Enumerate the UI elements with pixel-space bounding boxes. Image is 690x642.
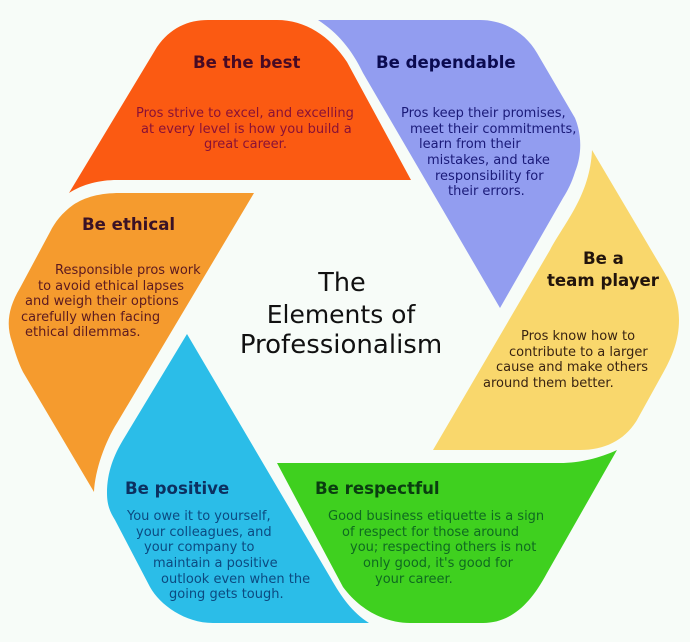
text: be a team player body: around them better.	[483, 376, 614, 391]
text: be ethical body: carefully when facing	[21, 310, 160, 325]
text: be the best body: great career.	[204, 137, 287, 152]
text: be respectful body: of respect for those around	[342, 525, 519, 540]
text: be dependable body: learn from their	[419, 137, 521, 152]
text: be positive body: your company to	[144, 540, 255, 555]
text: be positive body: your colleagues, and	[136, 525, 272, 540]
text: be respectful body: your career.	[375, 572, 453, 587]
text: be respectful body	[328, 509, 544, 587]
text: be ethical body: and weigh their options	[25, 294, 179, 309]
text: be a team player body: Pros know how to	[521, 329, 635, 344]
text: be positive body	[126, 509, 310, 602]
heading: be a team player: team player	[547, 271, 660, 290]
text: be dependable body: mistakes, and take	[427, 153, 550, 168]
title: Professionalism	[240, 330, 442, 360]
text: be dependable body: their errors.	[448, 184, 525, 199]
heading: be ethical: Be ethical	[82, 215, 175, 234]
text: be positive body: going gets tough.	[169, 587, 284, 602]
text: be ethical body: to avoid ethical lapses	[38, 279, 184, 294]
text: be the best body	[136, 106, 354, 152]
text: be the best body: at every level is how you build a	[141, 122, 352, 137]
heading: be a team player	[547, 249, 660, 290]
text: be ethical body: ethical dilemmas.	[25, 325, 140, 340]
heading: be respectful: Be respectful	[315, 479, 440, 498]
text: be ethical body: Responsible pros work	[55, 263, 201, 278]
text: be dependable body: Pros keep their promises,	[401, 106, 566, 121]
heading: be a team player: Be a	[583, 249, 624, 268]
panel: be the best	[69, 20, 411, 193]
panel: be dependable	[318, 20, 580, 308]
text: be a team player body: cause and make others	[496, 360, 648, 375]
text: be positive body: maintain a positive	[153, 556, 278, 571]
text: be the best body: Pros strive to excel, and excelling	[136, 106, 354, 121]
panel: be respectful	[277, 450, 617, 623]
title	[240, 268, 442, 360]
text: be dependable body	[401, 106, 576, 199]
heading: be the best: Be the best	[193, 53, 300, 72]
text: be a team player body: contribute to a larger	[509, 345, 648, 360]
title: The	[317, 268, 366, 298]
text: be respectful body: Good business etiquette is a sign	[328, 509, 544, 524]
text: be ethical body	[21, 263, 201, 340]
heading: be positive: Be positive	[125, 479, 229, 498]
text: be respectful body: you; respecting others is not	[350, 540, 536, 555]
text: be respectful body: only good, it's good for	[363, 556, 514, 571]
text: be dependable body: responsibility for	[435, 169, 544, 184]
title: Elements of	[267, 300, 416, 329]
panel: be ethical	[9, 193, 254, 492]
text: be positive body: You owe it to yourself,	[126, 509, 271, 524]
panel: be a team player	[433, 150, 679, 450]
text: be a team player body	[483, 329, 648, 391]
text: be positive body: outlook even when the	[161, 572, 310, 587]
panel: be positive	[107, 334, 369, 623]
text: be dependable body: meet their commitments,	[410, 122, 576, 137]
heading: be dependable: Be dependable	[376, 53, 516, 72]
